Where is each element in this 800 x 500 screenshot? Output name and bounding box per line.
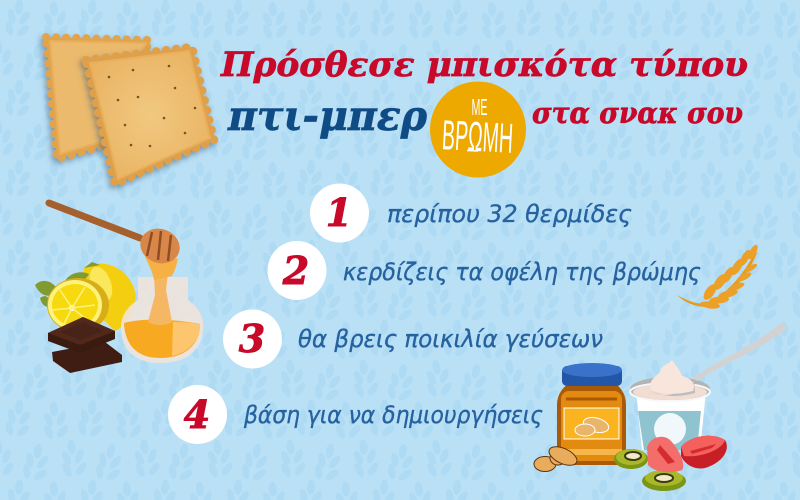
spoon xyxy=(650,323,786,396)
item 2 xyxy=(268,241,701,300)
item 2: 2 xyxy=(282,248,309,293)
item 1 xyxy=(310,184,632,242)
item 4: 4 xyxy=(184,392,210,437)
peanuts xyxy=(534,443,580,472)
honey jar xyxy=(121,255,203,363)
title line 2: πτι-μπερ xyxy=(227,92,428,140)
title line 1: Πρόσθεσε μπισκότα τύπου xyxy=(220,45,748,85)
back biscuit xyxy=(46,37,150,159)
illustration: honey, lemons and chocolate xyxy=(35,203,203,373)
title line 2 end: στα σνακ σου xyxy=(532,96,743,130)
badge: with oats: ΜΕ xyxy=(472,94,488,120)
kiwi slices xyxy=(614,449,686,491)
front biscuit xyxy=(86,47,214,184)
yogurt cup xyxy=(630,377,710,450)
item 3: 3 xyxy=(239,316,265,361)
lemon leaves xyxy=(35,272,89,307)
badge: with oats xyxy=(430,82,526,178)
whipped cream xyxy=(650,360,694,394)
peanut butter jar xyxy=(557,363,626,465)
lemon whole xyxy=(83,262,136,331)
item 2: κερδίζεις τα οφέλη της βρώμης xyxy=(343,258,701,286)
icon: golden wheat xyxy=(677,243,760,310)
honey dipper xyxy=(49,203,185,280)
illustration: peanut butter, yogurt, kiwi and strawberries xyxy=(534,323,786,491)
badge: with oats: ΒΡΩΜΗ xyxy=(441,111,514,162)
item 4 xyxy=(168,385,543,444)
item 3 xyxy=(223,310,603,368)
chocolate xyxy=(48,317,122,373)
strawberries xyxy=(647,436,727,472)
lemon half xyxy=(47,278,109,332)
item 3: θα βρεις ποικιλία γεύσεων xyxy=(298,325,603,353)
item 1: 1 xyxy=(326,190,352,235)
item 1: περίπου 32 θερμίδες xyxy=(387,200,632,228)
biscuits illustration xyxy=(46,37,214,184)
item 4: βάση για να δημιουργήσεις xyxy=(243,401,543,429)
